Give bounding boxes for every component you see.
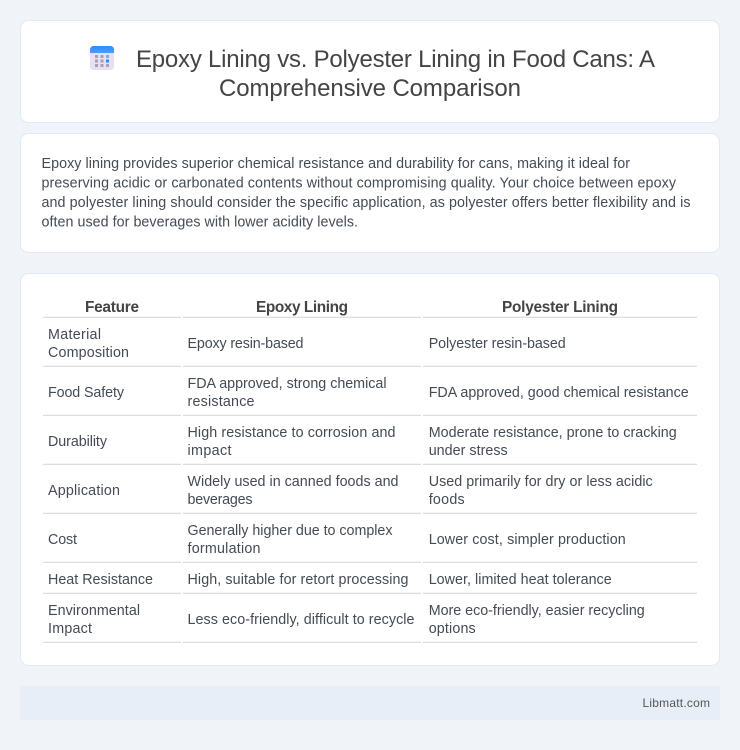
row: application: Application xyxy=(48,483,120,499)
row: environmental impact: Environmental xyxy=(48,603,140,619)
row: environmental impact: More eco-friendly, easier recycling xyxy=(429,603,645,619)
table header row: Epoxy Lining xyxy=(256,299,348,316)
row: food safety xyxy=(48,376,689,410)
table header row: Feature xyxy=(85,299,139,316)
row: application: Widely used in canned foods and xyxy=(188,474,399,490)
row: food safety: Food Safety xyxy=(48,385,125,401)
text block: introduction paragraph: Epoxy lining provides superior chemical resistance and durability for cans, making it ideal for xyxy=(42,156,630,172)
row: durability: Durability xyxy=(48,434,108,450)
row: food safety: FDA approved, strong chemical xyxy=(188,376,386,392)
row: cost: formulation xyxy=(188,541,261,557)
text block: introduction paragraph xyxy=(42,156,690,230)
row: cost: Lower cost, simpler production xyxy=(429,532,626,548)
row: material composition: Epoxy resin-based xyxy=(188,336,304,352)
row: environmental impact: options xyxy=(429,621,476,637)
row: heat resistance: High, suitable for retort processing xyxy=(188,572,409,588)
icon: calendar xyxy=(90,46,114,70)
row: food safety: FDA approved, good chemical resistance xyxy=(429,385,689,401)
table header row: Polyester Lining xyxy=(502,299,618,316)
row: durability xyxy=(48,425,677,459)
row: food safety: resistance xyxy=(188,394,255,410)
panel: comparison table xyxy=(20,274,720,666)
row: material composition: Composition xyxy=(48,345,129,361)
row: application: foods xyxy=(429,492,465,508)
row: application: Used primarily for dry or less acidic xyxy=(429,474,653,490)
panel: title card xyxy=(20,20,720,122)
row: cost: Cost xyxy=(48,532,77,548)
row: application xyxy=(48,474,653,508)
row: durability: High resistance to corrosion and xyxy=(188,425,396,441)
row: cost: Generally higher due to complex xyxy=(188,523,392,539)
row: cost xyxy=(48,523,626,557)
title: Comprehensive Comparison xyxy=(219,75,521,102)
footer: Libmatt.com xyxy=(642,696,710,710)
row: environmental impact: Impact xyxy=(48,621,92,637)
title: Epoxy Lining vs. Polyester Lining in Food Cans: A xyxy=(136,46,655,73)
row: environmental impact: Less eco-friendly, difficult to recycle xyxy=(188,612,415,628)
row: environmental impact xyxy=(48,603,645,637)
text block: introduction paragraph: preserving acidic or carbonated contents without compromising quality. Your choice between epoxy xyxy=(42,176,677,192)
row: material composition: Polyester resin-based xyxy=(429,336,566,352)
row: material composition: Material xyxy=(48,327,101,343)
table header row xyxy=(85,299,618,316)
footer xyxy=(20,686,720,720)
row: heat resistance: Heat Resistance xyxy=(48,572,153,588)
row: durability: under stress xyxy=(429,443,508,459)
row: heat resistance xyxy=(48,572,612,588)
row: durability: Moderate resistance, prone to cracking xyxy=(429,425,677,441)
row: durability: impact xyxy=(188,443,232,459)
title xyxy=(136,46,655,102)
text block: introduction paragraph: often used for beverages with lower acidity levels. xyxy=(42,214,358,230)
panel: introduction xyxy=(20,134,720,252)
text block: introduction paragraph: and polyester lining should consider the specific application, as polyester offers better flexibility and is xyxy=(42,195,690,211)
row: material composition xyxy=(48,327,566,361)
row: heat resistance: Lower, limited heat tolerance xyxy=(429,572,612,588)
row: application: beverages xyxy=(188,492,252,508)
